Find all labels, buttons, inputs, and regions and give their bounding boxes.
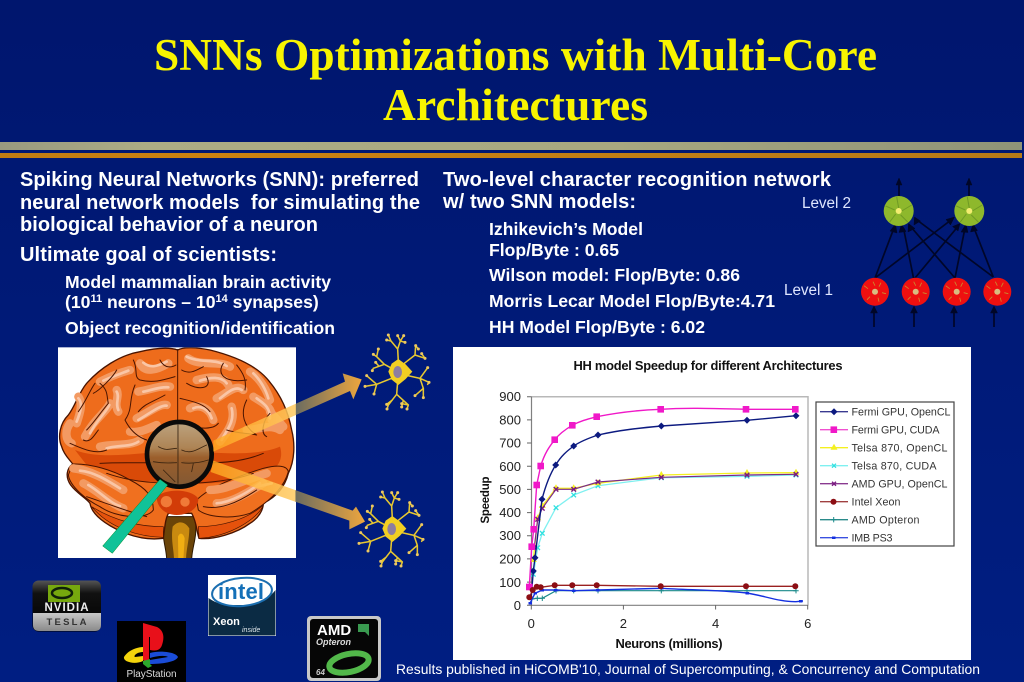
y axis title: Speedup — [480, 476, 492, 524]
left text block: spiking neural networks: Object recognition/identification — [65, 318, 335, 338]
left text block: spiking neural networks: Spiking Neural Networks (SNN): preferred — [20, 169, 419, 191]
y axis labels: 700 — [499, 436, 521, 450]
right text block: two-level character recognition: Wilson model: Flop/Byte: 0.86 — [489, 265, 740, 285]
y axis labels: 600 — [499, 459, 521, 474]
chart title: HH model Speedup for different Architectures — [574, 358, 842, 373]
legend — [816, 402, 954, 546]
series: IBM PS3 — [528, 587, 803, 604]
right text block: two-level character recognition: HH Model Flop/Byte : 6.02 — [489, 317, 705, 337]
y axis labels: 500 — [499, 482, 521, 497]
logo: AMD Opteron: AMD — [317, 622, 351, 639]
left text block: spiking neural networks: neurons – 10 — [102, 292, 216, 312]
legend: Telsa 870, CUDA — [852, 460, 937, 472]
y axis labels: 100 — [499, 575, 521, 590]
left text block: spiking neural networks: 11 — [90, 293, 102, 305]
connection arrows — [870, 178, 998, 327]
sulci — [70, 349, 270, 517]
legend: Intel Xeon — [852, 496, 901, 508]
right text block: two-level character recognition: Flop/Byte : 0.65 — [489, 240, 619, 260]
logo: AMD Opteron: Opteron — [316, 637, 352, 647]
legend: AMD GPU, OpenCL — [852, 478, 948, 490]
right text block: two-level character recognition: Two-level character recognition network — [443, 169, 832, 191]
y axis labels: 900 — [499, 389, 521, 404]
gyri highlight — [77, 357, 272, 506]
x axis labels: 4 — [712, 616, 719, 631]
title rule bands — [0, 142, 1022, 158]
x axis labels — [528, 616, 811, 631]
left text block: spiking neural networks: (10 — [65, 292, 90, 312]
icon: upper neuron — [365, 335, 429, 409]
y axis labels: 200 — [499, 552, 521, 566]
arrow: brain to lower neuron — [211, 461, 365, 529]
logo: Intel Xeon: Xeon — [213, 616, 240, 628]
logo: NVIDIA Tesla: TESLA — [46, 617, 87, 628]
image panel — [58, 347, 296, 558]
series: Telsa 870 CUDA — [531, 473, 798, 577]
y axis labels — [499, 389, 521, 613]
level labels: Level 2 — [802, 195, 851, 212]
legend: Fermi GPU, OpenCL — [852, 406, 951, 418]
lower lobes — [68, 464, 288, 538]
magnifying glass — [103, 422, 212, 553]
level labels: Level 1 — [784, 282, 833, 299]
brain outline — [60, 348, 294, 539]
level 1 nodes — [861, 278, 1011, 306]
title — [154, 30, 877, 130]
y axis labels: 800 — [499, 412, 521, 428]
logo: PlayStation — [117, 621, 186, 682]
handle — [103, 479, 168, 553]
series: Fermi GPU CUDA — [526, 406, 799, 590]
series: Telsa 870 OpenCL — [530, 469, 800, 562]
logo: Intel Xeon: inside — [242, 627, 260, 634]
lens — [147, 422, 212, 487]
left text block: spiking neural networks: biological behavior of a neuron — [20, 214, 318, 236]
logo: NVIDIA Tesla — [32, 580, 101, 632]
left text block: spiking neural networks: neural network models for simulating the — [20, 192, 420, 214]
left text block: spiking neural networks: synapses) — [228, 292, 319, 312]
left text block: spiking neural networks: 14 — [216, 293, 229, 305]
footer citation: Results published in HiCOMB'10, Journal of Supercomputing, & Concurrency and Computation — [396, 661, 980, 677]
plot frame and axes — [527, 397, 808, 610]
brain illustration with magnifier — [58, 347, 296, 560]
right text block: two-level character recognition: Morris Lecar Model Flop/Byte:4.71 — [489, 291, 775, 311]
y axis labels: 0 — [514, 598, 521, 613]
right text block: two-level character recognition: Izhikevich’s Model — [489, 219, 643, 239]
logo: AMD Opteron: 64 — [316, 668, 325, 677]
y axis labels: 300 — [499, 528, 521, 543]
left text block: spiking neural networks: Ultimate goal of scientists: — [20, 244, 277, 266]
brain stem — [163, 517, 196, 560]
series: Intel Xeon — [526, 582, 798, 600]
logo: Intel Xeon: intel — [218, 579, 264, 604]
x axis labels: 2 — [620, 616, 627, 631]
cerebrum underside — [75, 447, 281, 484]
x axis labels: 6 — [804, 616, 811, 631]
right text block: two-level character recognition: w/ two SNN models: — [442, 191, 636, 213]
chart panel: HH model speedup — [453, 347, 971, 660]
logo: Intel Xeon — [208, 575, 276, 636]
x axis title: Neurons (millions) — [616, 636, 722, 651]
series: Fermi GPU OpenCL — [530, 412, 800, 600]
level 2 nodes — [884, 196, 984, 226]
right text block: two-level character recognition — [442, 169, 832, 337]
logo: PlayStation: PlayStation — [126, 669, 176, 680]
legend: Fermi GPU, CUDA — [852, 424, 940, 436]
y axis labels: 400 — [499, 505, 521, 520]
x axis labels: 0 — [528, 616, 535, 631]
left text block: spiking neural networks — [20, 169, 420, 338]
left text block: spiking neural networks: Model mammalian brain activity — [65, 272, 331, 292]
legend: IMB PS3 — [852, 532, 893, 544]
title: Architectures — [383, 80, 648, 130]
legend: Telsa 870, OpenCL — [852, 442, 948, 454]
legend: AMD Opteron — [852, 514, 920, 526]
arrow: brain to upper neuron — [213, 373, 362, 452]
network diagram — [784, 178, 1011, 327]
logo: NVIDIA Tesla: NVIDIA — [44, 602, 88, 614]
icon: lower neuron — [359, 492, 423, 566]
logo: AMD Opteron — [307, 616, 381, 681]
level labels — [784, 195, 851, 299]
series: AMD Opteron — [529, 588, 799, 602]
title: SNNs Optimizations with Multi-Core — [154, 30, 877, 80]
series: AMD GPU OpenCL — [532, 472, 798, 550]
gyri mid tone — [66, 358, 283, 508]
